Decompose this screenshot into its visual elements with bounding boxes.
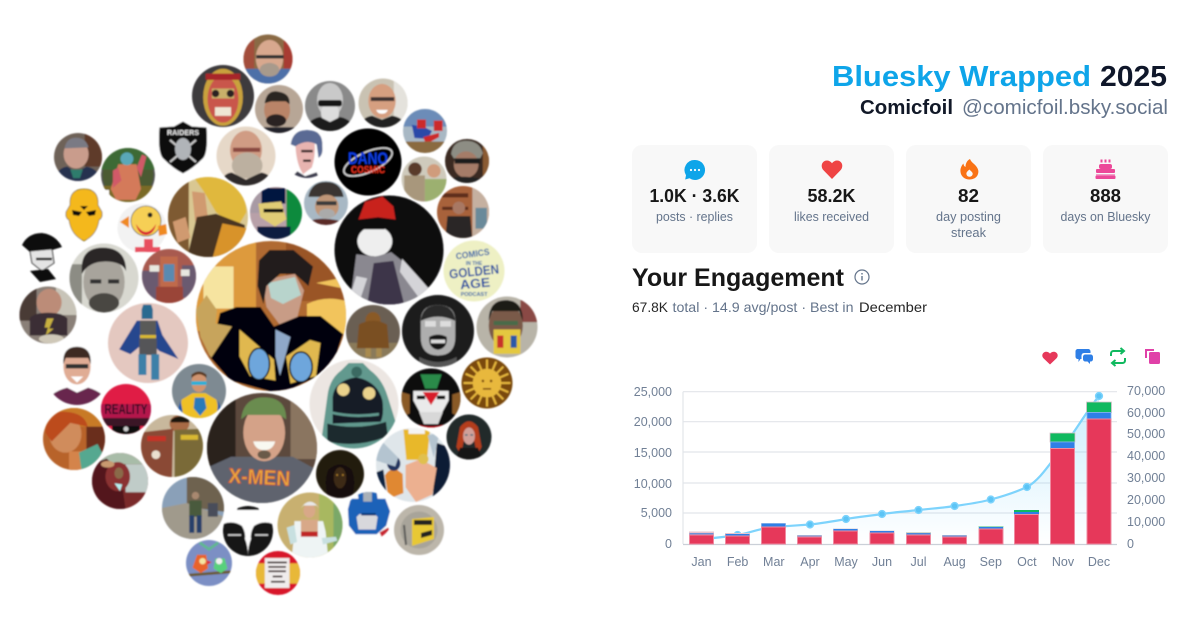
avatar: man in black hat drawing (22, 233, 62, 282)
stat card: posts and replies: posts · replies (656, 210, 733, 224)
profile name and handle: Comicfoil (860, 97, 953, 119)
month labels: Apr (800, 555, 820, 569)
engagement heading: Your Engagement (632, 264, 845, 292)
left axis labels: 0 (665, 537, 672, 551)
month labels: Jan (691, 555, 712, 569)
avatar: Comics in the Golden Age podcast: PODCAST (461, 292, 488, 298)
avatar: Dano Cosmic logo: DANO (348, 149, 388, 168)
avatar: Comics in the Golden Age podcast: AGE (459, 275, 491, 292)
month labels: May (834, 555, 859, 569)
bar: Aug (942, 535, 967, 544)
engagement summary (632, 299, 927, 315)
avatar: The Reality logo: REALITY (104, 401, 148, 418)
avatar: man in X-Men t-shirt: X-MEN (228, 465, 291, 491)
avatar: blond comic character (168, 177, 248, 257)
avatar: hooded dark figure (316, 450, 364, 498)
avatar: man in X-Men t-shirt (207, 393, 317, 503)
avatar: yellow masked head (59, 189, 109, 241)
avatar: Batman action figure (108, 303, 188, 383)
bar: Dec (1086, 402, 1112, 544)
avatar: armoured hero (92, 453, 148, 509)
avatar: The Reality logo (101, 384, 151, 434)
avatar: Dano Cosmic logo: COSMIC (351, 165, 385, 176)
month labels: Jun (872, 555, 892, 569)
bar: May (833, 528, 858, 544)
stat card: posting streak: day posting (936, 210, 1001, 224)
month labels: Oct (1017, 555, 1037, 569)
month labels: Nov (1052, 555, 1075, 569)
avatar: man with comic mug (476, 296, 538, 358)
stat card: days on Bluesky: days on Bluesky (1060, 210, 1151, 224)
month labels: Jul (911, 555, 926, 569)
icon: replies bubbles (1076, 349, 1093, 364)
avatar: green frog robot (310, 360, 398, 454)
profile name and handle: @comicfoil.bsky.social (962, 97, 1168, 119)
month labels: Mar (763, 555, 785, 569)
stat card: likes: likes received (794, 210, 869, 224)
bar: Nov (1050, 433, 1075, 544)
month labels: Sep (980, 555, 1002, 569)
title: Bluesky Wrapped (832, 61, 1091, 93)
avatar: ape creature (346, 305, 400, 359)
stat card: posting streak: 82 (958, 186, 979, 206)
avatar: cartoon birds (186, 540, 232, 586)
avatar: bearded man with glasses (216, 126, 276, 186)
bar: Feb (725, 533, 750, 544)
avatar: man in purple shirt (52, 346, 102, 406)
right axis labels: 40,000 (1127, 449, 1165, 463)
avatar: person reading comics (141, 415, 203, 477)
avatar: Dano Cosmic logo (334, 128, 402, 196)
avatar: comic man with grey hair (290, 129, 324, 179)
avatar: Pac-Man (118, 204, 167, 252)
left axis labels: 5,000 (641, 506, 672, 520)
avatar: golden sun (462, 358, 512, 408)
avatar: man with dark glasses (445, 139, 489, 183)
left axis labels: 20,000 (634, 415, 672, 429)
avatar: cartoon man in glasses (402, 295, 474, 367)
stat card: days on Bluesky (1043, 145, 1168, 253)
avatar: two men (402, 156, 446, 202)
stacked monthly bars (689, 402, 1112, 544)
right axis labels: 10,000 (1127, 515, 1165, 529)
engagement summary: 67.8K (632, 299, 669, 315)
icon: chat bubble (685, 160, 705, 180)
avatar: Comics in the Golden Age podcast (444, 240, 504, 302)
avatar: yellow caped superhero (172, 364, 226, 418)
avatar: bald man smiling (358, 78, 408, 128)
avatar: Comics in the Golden Age podcast: IN THE (466, 261, 483, 267)
left axis labels: 10,000 (634, 477, 672, 491)
avatar: winged comic heroes (376, 428, 450, 502)
icon: info (855, 270, 869, 284)
icon: birthday cake (1096, 160, 1116, 179)
bar: Jun (870, 530, 894, 544)
avatar: yellow package on plate (394, 505, 444, 555)
avatar: zombie face (192, 65, 254, 127)
icon: reposts arrows (1111, 348, 1125, 366)
icon: likes heart (1042, 352, 1058, 364)
avatar: main comic hero (196, 241, 346, 394)
right axis labels: 20,000 (1127, 493, 1165, 507)
left axis labels (634, 385, 672, 551)
bar: Jul (906, 532, 931, 544)
avatar: man in black and white (70, 244, 138, 312)
avatar: black and white swirl (223, 506, 273, 556)
bar: Oct (1014, 510, 1039, 544)
avatar: white haired comic figure (278, 492, 342, 558)
avatar: Comics in the Golden Age podcast: GOLDEN (448, 261, 500, 282)
avatar: man in bookshop (437, 186, 489, 238)
avatar: man eating with chopsticks (20, 286, 76, 344)
avatar: anime figure in green and black (250, 187, 302, 239)
icon: heart (822, 160, 842, 179)
month labels: Feb (727, 555, 748, 569)
left axis labels: 25,000 (634, 385, 672, 399)
title: 2025 (1100, 61, 1167, 93)
avatar: Raiders shield: RAIDERS (167, 128, 199, 137)
avatar: white haired man with sunglasses (305, 81, 355, 131)
icon: quotes squares (1146, 350, 1160, 364)
avatar: skull joker (402, 368, 460, 428)
engagement chart (634, 384, 1165, 569)
stat card: days on Bluesky: 888 (1090, 186, 1121, 206)
cumulative line area (702, 396, 1099, 544)
stat card: likes (769, 145, 894, 253)
cumulative line (702, 396, 1099, 539)
bar: Sep (978, 526, 1004, 544)
right axis labels: 30,000 (1127, 471, 1165, 485)
bar: Jan (689, 532, 714, 544)
right axis labels: 60,000 (1127, 406, 1165, 420)
avatar: comic robot figure (142, 249, 196, 303)
avatar: Raiders shield (158, 121, 208, 174)
avatar: woman with auburn hair (43, 408, 105, 470)
avatar: Santa superhero (334, 196, 444, 304)
avatar: traveller on old street (162, 477, 224, 539)
avatar: Spider-Man comic (403, 109, 447, 153)
line points (698, 393, 1102, 542)
bar: Apr (797, 535, 822, 544)
avatar: Spanish flag badge (256, 551, 300, 595)
stat card: likes: 58.2K (808, 186, 856, 206)
profile name and handle (860, 97, 1168, 119)
left axis labels: 15,000 (634, 446, 672, 460)
icon: flame (960, 159, 978, 180)
right axis labels (1127, 384, 1165, 551)
avatar: man with wide hat (304, 181, 348, 225)
stat card: posts and replies (632, 145, 757, 253)
right axis labels: 70,000 (1127, 384, 1165, 398)
stat card: posting streak (906, 145, 1031, 253)
engagement summary: total · 14.9 avg/post · Best in (672, 299, 854, 315)
avatar: Optimus Prime (345, 492, 393, 540)
right axis labels: 50,000 (1127, 427, 1165, 441)
avatar: Comics in the Golden Age podcast: COMICS (455, 247, 490, 261)
month labels: Aug (943, 555, 966, 569)
avatar: woman with red hair (446, 414, 492, 460)
month labels (691, 555, 1110, 569)
stat card: posting streak: streak (951, 226, 987, 240)
avatar: man with beard and glasses (255, 85, 303, 134)
avatar cluster (20, 34, 538, 595)
right axis labels: 0 (1127, 537, 1134, 551)
avatar: man in dark jacket (54, 133, 102, 181)
engagement summary: December (859, 299, 927, 315)
stat card: posts and replies: 1.0K · 3.6K (650, 186, 740, 206)
avatar: colourful costume (101, 148, 155, 202)
bar: Mar (761, 523, 786, 544)
avatar: bald man with glasses (244, 34, 292, 84)
month labels: Dec (1088, 555, 1110, 569)
legend icons (1042, 348, 1160, 366)
